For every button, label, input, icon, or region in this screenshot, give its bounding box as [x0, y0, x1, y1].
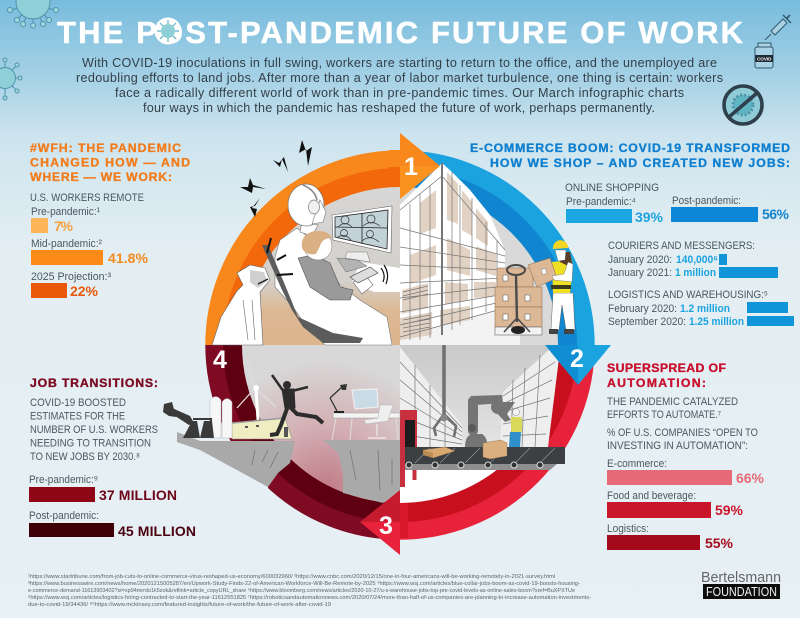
logo: Bertelsmann Foundation [701, 569, 781, 599]
description: NUMBER OF U.S. WORKERS [30, 424, 158, 436]
shelving [400, 163, 520, 345]
logistics and warehousing: 1.25 million [689, 316, 744, 328]
heading [470, 141, 790, 170]
description [30, 397, 158, 463]
quadrant 2 background [400, 186, 568, 345]
subheading: U.S. WORKERS REMOTE [30, 192, 144, 204]
couriers and messengers: COURIERS AND MESSENGERS: [608, 240, 755, 252]
arc 3: red [400, 345, 586, 531]
couriers and messengers: 1 million [675, 267, 716, 279]
couriers and messengers [608, 240, 778, 279]
heading: #WFH: THE PANDEMIC [30, 141, 181, 155]
couriers and messengers: January 2021: [608, 267, 672, 279]
illustration: warehouse [400, 163, 575, 345]
right shelves [500, 347, 560, 447]
bar: online post-pandemic: Post-pandemic: [672, 195, 741, 207]
bar: logistics [607, 523, 734, 551]
bar: pre-pandemic: 37 MILLION [99, 487, 177, 503]
intro text: With COVID-19 inoculations in full swing, workers are starting to return to the office, and the unemployed are [82, 56, 717, 70]
bar: pre-pandemic [29, 474, 177, 503]
bar: e-commerce [607, 458, 765, 486]
right cliff [323, 440, 400, 503]
description: % OF U.S. COMPANIES “OPEN TO [607, 427, 758, 439]
heading: HOW WE SHOP – AND CREATED NEW JOBS: [490, 156, 790, 170]
silos [210, 396, 232, 438]
arc 1: orange [214, 159, 400, 345]
bar: 2025 projection: 22% [70, 283, 99, 299]
heading [30, 141, 190, 184]
robot arm [465, 395, 515, 447]
bar: mid-pandemic: Mid-pandemic:² [31, 238, 102, 250]
description: THE PANDEMIC CATALYZED [607, 396, 738, 408]
left cliff [177, 432, 295, 487]
icon: virus in title letter O [154, 18, 182, 44]
logo: Bertelsmann Foundation: Bertelsmann [701, 569, 781, 586]
intro text [76, 56, 723, 115]
footnotes [28, 574, 591, 608]
quadrant 4 background [232, 345, 400, 504]
footnotes: ⁶https://www.wsj.com/articles/logistics-hiring-contracted-to-start-the-year-11612551825 ⁷https://roboticsandautomationnews.com/2020/07/24/more-than-half-of-us-companies-are-planning-to-increase-automation-investments- [28, 595, 591, 601]
logistics and warehousing: February 2020: [608, 303, 677, 315]
bar: food and beverage: 59% [715, 502, 744, 518]
quadrant 1 background [260, 187, 400, 345]
icon: syringe and vial [755, 15, 791, 68]
man body [275, 228, 392, 345]
arc 2: blue [400, 159, 586, 345]
illustration: job transition [163, 360, 400, 503]
arrowhead 2: 2 [570, 345, 584, 373]
bar: post-pandemic: 45 MILLION [118, 523, 196, 539]
heading: CHANGED HOW — AND [30, 156, 190, 170]
icon: no virus [724, 86, 762, 124]
icon: virus left [0, 58, 22, 100]
illustration: automation [400, 345, 565, 487]
logistics and warehousing: September 2020: [608, 316, 686, 328]
heading: WHERE — WE WORK: [30, 170, 172, 184]
subheading: online shopping: ONLINE SHOPPING [565, 182, 659, 194]
icon: syringe and vial: COVID [757, 57, 772, 62]
bar: 2025 projection: 2025 Projection:³ [31, 271, 111, 283]
bar: online post-pandemic: 56% [762, 206, 790, 222]
bar: online pre-pandemic: 39% [635, 209, 664, 225]
factory [232, 418, 292, 439]
arrowhead 1: 1 [404, 153, 418, 181]
bar: post-pandemic [29, 510, 196, 539]
red machine [400, 410, 417, 487]
bar: food and beverage: Food and beverage: [607, 490, 696, 502]
worker [528, 240, 575, 334]
factory worker [509, 408, 522, 447]
conveyor [405, 447, 565, 470]
footnotes: due-to-covid-19/34436/ ⁸⁹https://www.mckinsey.com/featured-insights/future-of-work/the-future-of-work-after-covid-19 [28, 602, 331, 608]
logistics and warehousing [608, 289, 794, 328]
bar: 2025 projection [31, 271, 111, 299]
desk [330, 384, 400, 440]
bar: online pre-pandemic [566, 196, 664, 225]
intro text: face a radically different world of work than in pre-pandemic times. Our March infographic charts [115, 86, 684, 100]
description: COVID-19 BOOSTED [30, 397, 126, 409]
bar: pre-pandemic [31, 206, 100, 234]
illustration: work from home [212, 140, 400, 345]
title: THE POST-PANDEMIC FUTURE OF WORK [57, 15, 744, 50]
arc 4: dark red [214, 345, 400, 531]
heading [607, 361, 726, 390]
jumping figure [270, 375, 323, 435]
bar: mid-pandemic: 41.8% [108, 250, 149, 266]
bar: mid-pandemic [31, 238, 149, 266]
bar: food and beverage [607, 490, 744, 518]
chair [262, 245, 363, 343]
footnotes: e-commerce-demand-11613903402?st=xp94mrrdo1k5zok&reflink=article_copyURL_share ⁵https://www.bloomberg.com/news/articles/2020-10-27/u-s-warehouse-jobs-top-pre-covid-levels-as-online-sales-boom?sref=BuXPXTUe [28, 588, 575, 594]
panel: job transitions stats [29, 376, 196, 539]
intro text: four ways in which the pandemic has reshaped the future of work, perhaps permanently. [143, 101, 655, 115]
description [607, 396, 758, 452]
arrowhead 4: 4 [213, 346, 227, 374]
heading: AUTOMATION: [607, 376, 706, 390]
arrowhead 1 [389, 133, 440, 199]
cliff texture [252, 450, 392, 490]
bar: e-commerce: 66% [736, 470, 765, 486]
left shelves [400, 347, 462, 447]
bar: logistics: Logistics: [607, 523, 649, 535]
pallet boxes [495, 268, 542, 335]
bar: post-pandemic: Post-pandemic: [29, 510, 99, 522]
intro text: redoubling efforts to land jobs. After more than a year of labor market turbulence, one thing is certain: workers [76, 71, 723, 85]
logistics and warehousing: LOGISTICS AND WAREHOUSING:⁵ [608, 289, 768, 301]
bar: logistics: 55% [705, 535, 734, 551]
logistics and warehousing: 1.2 million [680, 303, 730, 315]
monitor with video call [332, 206, 392, 262]
excavator [163, 402, 214, 438]
bar: pre-pandemic: 7% [54, 218, 74, 234]
child [298, 231, 378, 300]
wind turbine [237, 360, 276, 420]
pallet jack [504, 265, 530, 334]
panel: central circle [163, 133, 611, 555]
gripper [434, 345, 456, 437]
arrowhead 3 [360, 490, 408, 555]
boxes on belt [423, 440, 507, 459]
couriers and messengers: January 2020: [608, 254, 672, 266]
footnotes: ¹https://www.startribune.com/from-job-cuts-to-online-commerce-virus-reshaped-us-economy/600032960/ ²https://www.cnbc.com/2020/12/15/one-in-four-americans-will-be-working-remotely-in-2021-survey.html [28, 574, 555, 580]
panel: work from home stats [30, 141, 190, 299]
icon: virus top left [8, 0, 58, 28]
description: INVESTING IN AUTOMATION”: [607, 440, 748, 452]
lightning bolts [240, 140, 312, 217]
couriers and messengers: 140,000⁶ [676, 254, 718, 266]
arrowhead 2 [545, 345, 611, 385]
bar: pre-pandemic: Pre-pandemic:¹ [31, 206, 100, 218]
heading: JOB TRANSITIONS: [30, 376, 158, 390]
desk and keyboard [337, 258, 400, 292]
bar: online post-pandemic [671, 195, 790, 222]
description: EFFORTS TO AUTOMATE.⁷ [607, 409, 721, 421]
bar: pre-pandemic: Pre-pandemic:⁹ [29, 474, 98, 486]
bar: e-commerce: E-commerce: [607, 458, 667, 470]
description: NEEDING TO TRANSITION [30, 438, 151, 450]
panel: automation stats [607, 361, 765, 551]
description: ESTIMATES FOR THE [30, 410, 125, 422]
heading: E-COMMERCE BOOM: COVID-19 TRANSFORMED [470, 141, 790, 155]
quadrant 3 background [400, 345, 549, 503]
bar: online pre-pandemic: Pre-pandemic:⁴ [566, 196, 636, 208]
description: TO NEW JOBS BY 2030.⁸ [30, 451, 140, 463]
arrowhead 3: 3 [379, 512, 393, 540]
dog [212, 265, 270, 345]
footnotes: ³https://www.businesswire.com/news/home/20201215005287/en/Upwork-Study-Finds-22-of-American-Workforce-Will-Be-Remote-by-2025 ⁴https://www.wsj.com/articles/blue-collar-jobs-boom-as-covid-19-boosts-housing- [28, 581, 580, 587]
heading: SUPERSPREAD OF [607, 361, 726, 375]
logo: Bertelsmann Foundation: FOUNDATION [706, 585, 777, 599]
man head with headset [288, 184, 326, 236]
panel: e-commerce stats [470, 141, 794, 328]
motion lines [267, 238, 388, 284]
